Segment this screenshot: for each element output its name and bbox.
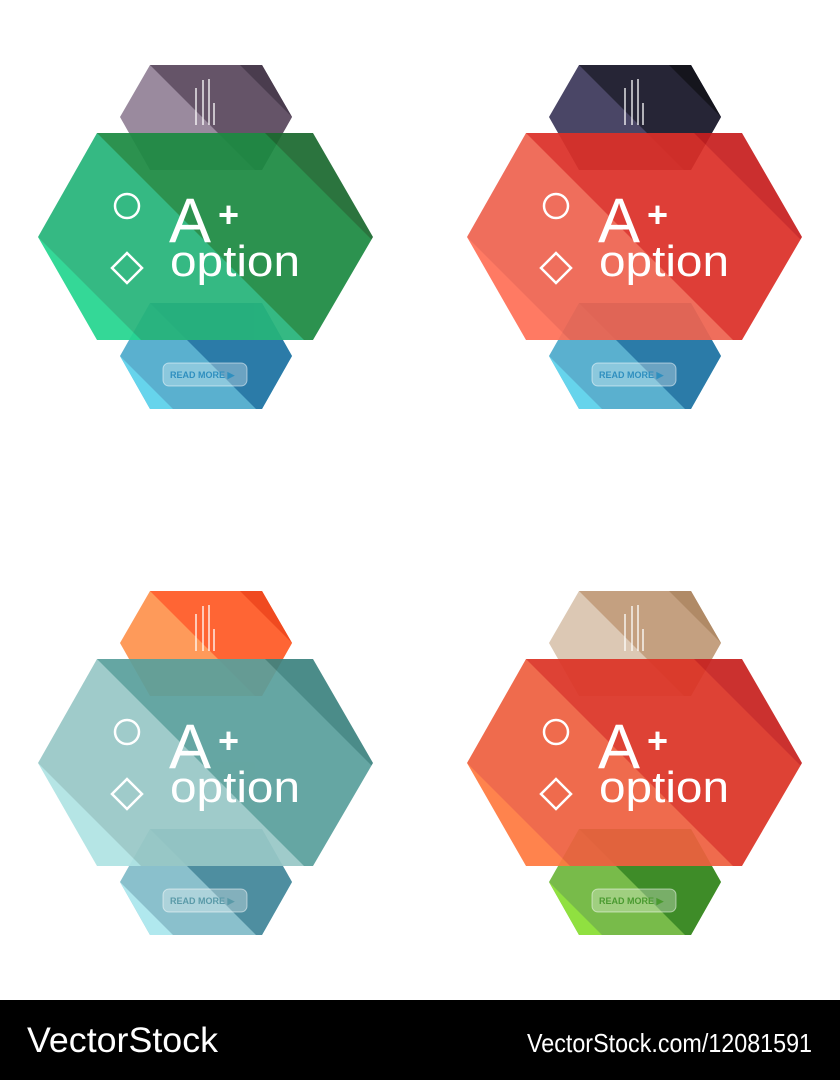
- heading: A+ option: [598, 712, 729, 812]
- icon: bars: [196, 79, 214, 125]
- heading: A+ option: [598, 186, 729, 286]
- icon: diamond: [112, 253, 142, 283]
- footer url text: VectorStock.com/12081591: [527, 1028, 812, 1058]
- panel: red option hexagon group: [467, 65, 802, 409]
- icon: bars: [625, 605, 643, 651]
- heading: A+ option: A: [598, 712, 640, 782]
- icon: circle: [544, 194, 568, 218]
- bottom hexagon: green with button: [549, 829, 721, 935]
- heading: A+ option: option: [170, 237, 300, 286]
- top hexagon: purple with bar icon: [120, 65, 292, 170]
- big hexagon: red: [467, 133, 802, 340]
- icon: circle: [544, 720, 568, 744]
- heading: A+ option: +: [647, 194, 668, 235]
- big hexagon: orange-red: [467, 659, 802, 866]
- icon: diamond: [541, 779, 571, 809]
- bottom hexagon: blue with button: [120, 303, 292, 409]
- heading: A+ option: A: [598, 186, 640, 256]
- heading: A+ option: option: [599, 237, 729, 286]
- button: read more: [163, 363, 247, 386]
- icon: bars: [196, 605, 214, 651]
- heading: A+ option: option: [599, 763, 729, 812]
- heading: A+ option: [169, 712, 300, 812]
- heading: A+ option: [169, 186, 300, 286]
- button: read more: READ MORE ▶: [599, 896, 665, 906]
- button: read more: READ MORE ▶: [170, 896, 236, 906]
- big hexagon: teal: [38, 659, 373, 866]
- big hexagon: green: [38, 133, 373, 340]
- icon: diamond: [112, 779, 142, 809]
- icon: circle: [115, 194, 139, 218]
- footer bar: [0, 1000, 840, 1080]
- top hexagon: orange with bar icon: [120, 591, 292, 696]
- button: read more: [592, 363, 676, 386]
- icon: diamond: [541, 253, 571, 283]
- panel: orange-red option hexagon group: [467, 591, 802, 935]
- top hexagon: navy with bar icon: [549, 65, 721, 170]
- heading: A+ option: +: [218, 720, 239, 761]
- heading: A+ option: +: [218, 194, 239, 235]
- panel: green option hexagon group: [38, 65, 373, 409]
- bottom hexagon: grey-blue with button: [120, 829, 292, 935]
- panel: teal option hexagon group: [38, 591, 373, 935]
- heading: A+ option: +: [647, 720, 668, 761]
- heading: A+ option: A: [169, 186, 211, 256]
- icon: bars: [625, 79, 643, 125]
- top hexagon: tan with bar icon: [549, 591, 721, 696]
- button: read more: [592, 889, 676, 912]
- bottom hexagon: blue with button: [549, 303, 721, 409]
- button: read more: READ MORE ▶: [170, 370, 236, 380]
- icon: circle: [115, 720, 139, 744]
- button: read more: READ MORE ▶: [599, 370, 665, 380]
- button: read more: [163, 889, 247, 912]
- heading: A+ option: option: [170, 763, 300, 812]
- heading: A+ option: A: [169, 712, 211, 782]
- footer logo text: VectorStock: [27, 1021, 219, 1060]
